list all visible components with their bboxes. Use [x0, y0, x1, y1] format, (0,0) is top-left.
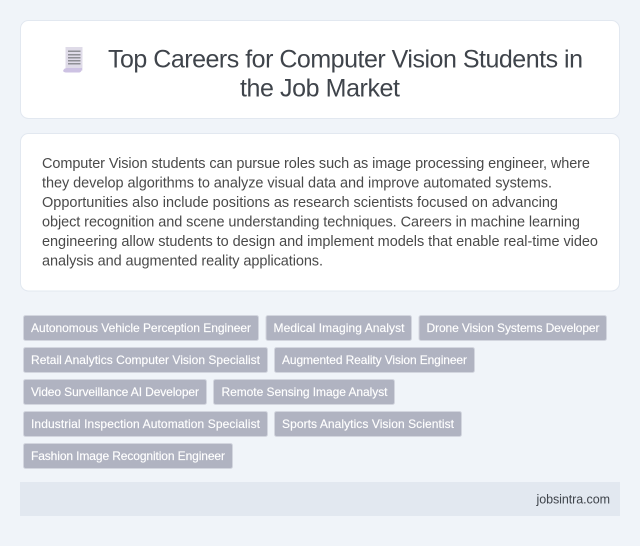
- tag: Autonomous Vehicle Perception Engineer: Autonomous Vehicle Perception Engineer: [31, 321, 251, 335]
- icon: paper scroll: [63, 47, 82, 72]
- tag: Industrial Inspection Automation Specialist: [24, 412, 268, 436]
- tag: Drone Vision Systems Developer: [419, 316, 606, 340]
- description text: Opportunities also include positions as research scientists focused on advancing: [42, 195, 558, 211]
- tag: Video Surveillance AI Developer: [24, 380, 206, 404]
- panel: description card: [20, 134, 620, 291]
- career tags: [24, 316, 606, 468]
- title: [108, 46, 583, 102]
- tag: Autonomous Vehicle Perception Engineer: [24, 316, 258, 340]
- tag: Remote Sensing Image Analyst: [214, 380, 394, 404]
- footer bar: [20, 482, 620, 516]
- tag: Augmented Reality Vision Engineer: Augmented Reality Vision Engineer: [282, 353, 467, 367]
- description text: [42, 156, 598, 270]
- tag: Fashion Image Recognition Engineer: Fashion Image Recognition Engineer: [31, 449, 225, 463]
- description text: object recognition and scene understanding techniques. Careers in machine learning: [42, 214, 580, 230]
- description text: engineering allow students to design and implement models that enable real-time video: [42, 234, 598, 250]
- panel: title card: [20, 20, 620, 118]
- description text: analysis and augmented reality applications.: [42, 254, 323, 270]
- tag: Sports Analytics Vision Scientist: [274, 412, 462, 436]
- tag: Retail Analytics Computer Vision Specialist: [24, 348, 268, 372]
- title: Top Careers for Computer Vision Students in: [108, 46, 583, 74]
- tag: Sports Analytics Vision Scientist: Sports Analytics Vision Scientist: [282, 417, 455, 431]
- description text: they develop algorithms to analyze visual data and improve automated systems.: [42, 176, 552, 192]
- tag: Drone Vision Systems Developer: Drone Vision Systems Developer: [426, 321, 600, 335]
- tag: Fashion Image Recognition Engineer: [24, 444, 232, 468]
- tag: Medical Imaging Analyst: [266, 316, 412, 340]
- footer source text: jobsintra.com: [536, 492, 610, 506]
- tag: Video Surveillance AI Developer: Video Surveillance AI Developer: [31, 385, 199, 399]
- tag: Remote Sensing Image Analyst: Remote Sensing Image Analyst: [222, 385, 388, 399]
- tag: Augmented Reality Vision Engineer: [274, 348, 474, 372]
- title: the Job Market: [240, 74, 400, 102]
- tag: Medical Imaging Analyst: Medical Imaging Analyst: [274, 321, 405, 335]
- tag: Retail Analytics Computer Vision Specialist: Retail Analytics Computer Vision Specialist: [31, 353, 261, 367]
- tag: Industrial Inspection Automation Specialist: Industrial Inspection Automation Specialist: [31, 417, 261, 431]
- description text: Computer Vision students can pursue roles such as image processing engineer, where: [42, 156, 590, 172]
